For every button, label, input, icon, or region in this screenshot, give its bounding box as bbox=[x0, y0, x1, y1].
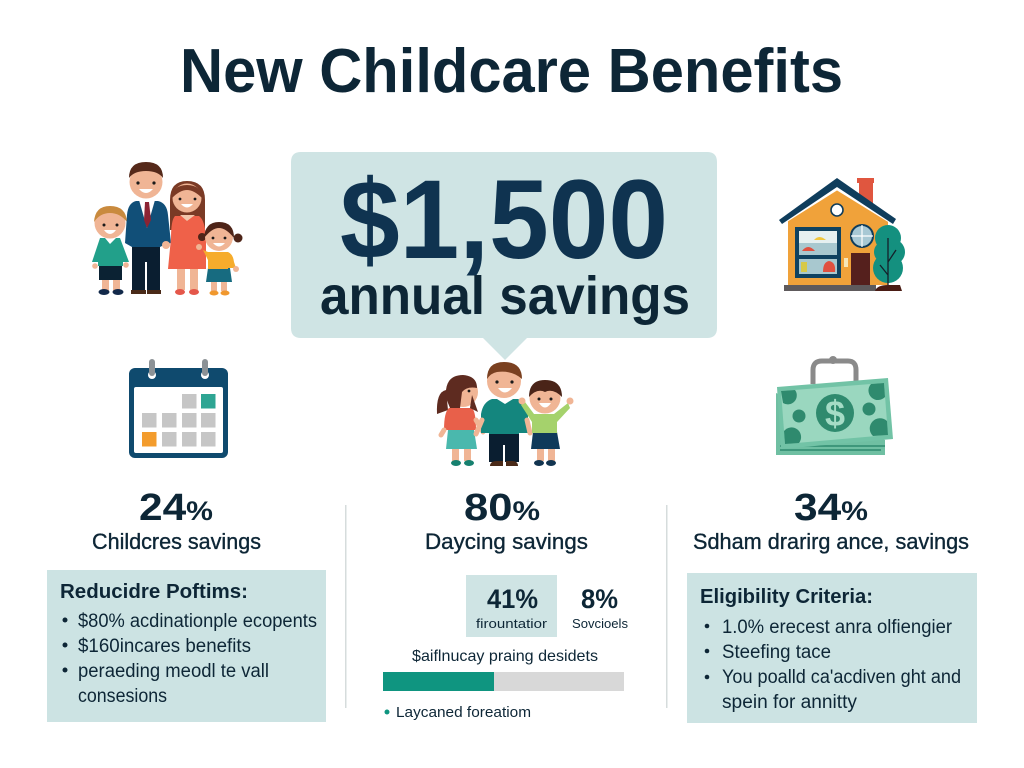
stat box: 41%: firountatior bbox=[476, 616, 548, 631]
panel: eligibility criteria: 1.0% erecest anra olfiengier bbox=[722, 617, 953, 638]
panel: reduced premiums: consesions bbox=[78, 686, 167, 707]
stat box: 41% bbox=[466, 575, 557, 637]
column divider right bbox=[666, 505, 668, 708]
panel: reduced premiums: peraeding meodl te vall bbox=[78, 661, 269, 682]
stat box: 41%: 41% bbox=[487, 584, 538, 614]
panel: reduced premiums: $80% acdinationple ecopents bbox=[78, 611, 317, 632]
legend item: Laycaned foreatiom bbox=[396, 704, 531, 721]
stat: 8%: Sovcioels bbox=[572, 616, 628, 631]
icon: house bbox=[779, 178, 905, 291]
father bbox=[125, 162, 171, 294]
boy bbox=[92, 206, 129, 295]
column divider left bbox=[345, 505, 346, 708]
stat: 80% daycare savings: Daycing savings bbox=[425, 529, 588, 554]
stat: 34% savings: 34% bbox=[794, 487, 868, 529]
mother bbox=[162, 181, 206, 295]
panel: reduced premiums: Reducidre Poftims: bbox=[60, 581, 248, 603]
panel: eligibility criteria: Steefing tace bbox=[722, 642, 831, 663]
icon: parent with two children bbox=[437, 362, 574, 466]
stat: 8% bbox=[572, 584, 628, 631]
callout: annual savings: annual savings bbox=[320, 266, 690, 326]
panel: reduced premiums: $160incares benefits bbox=[78, 636, 251, 657]
stat: 34% savings: Sdham drarirg ance, savings bbox=[693, 529, 969, 554]
parent bbox=[476, 362, 530, 466]
panel: eligibility criteria: Eligibility Criteria: bbox=[700, 586, 873, 608]
stat: 24% childcare savings: Childcres savings bbox=[92, 529, 261, 554]
callout: annual savings bbox=[291, 152, 717, 360]
panel: reduced premiums bbox=[47, 570, 326, 722]
progress bar bbox=[383, 672, 624, 691]
title: New Childcare Benefits bbox=[180, 37, 843, 106]
progress bar heading: $aiflnucay praing desidets bbox=[412, 648, 598, 665]
icon: banknotes with handle: $ bbox=[825, 393, 845, 434]
stat: 8%: 8% bbox=[581, 584, 618, 614]
panel: eligibility criteria: spein for annitty bbox=[722, 692, 857, 713]
panel: eligibility criteria bbox=[687, 573, 977, 723]
stat: 34% savings bbox=[693, 487, 969, 554]
girl bbox=[196, 222, 242, 296]
panel: eligibility criteria: You poalld ca'acdiven ght and bbox=[722, 667, 961, 688]
girl with ponytail bbox=[437, 375, 483, 466]
stat: 80% daycare savings: 80% bbox=[464, 487, 540, 529]
icon: banknotes with handle bbox=[776, 356, 893, 455]
stat: 24% childcare savings: 24% bbox=[139, 487, 213, 529]
stat: 24% childcare savings bbox=[92, 487, 261, 554]
waving child bbox=[518, 380, 574, 466]
stat: 80% daycare savings bbox=[425, 487, 588, 554]
icon: calendar bbox=[129, 359, 228, 458]
icon: family of four bbox=[92, 162, 242, 296]
callout: annual savings: $1,500 bbox=[340, 157, 668, 282]
